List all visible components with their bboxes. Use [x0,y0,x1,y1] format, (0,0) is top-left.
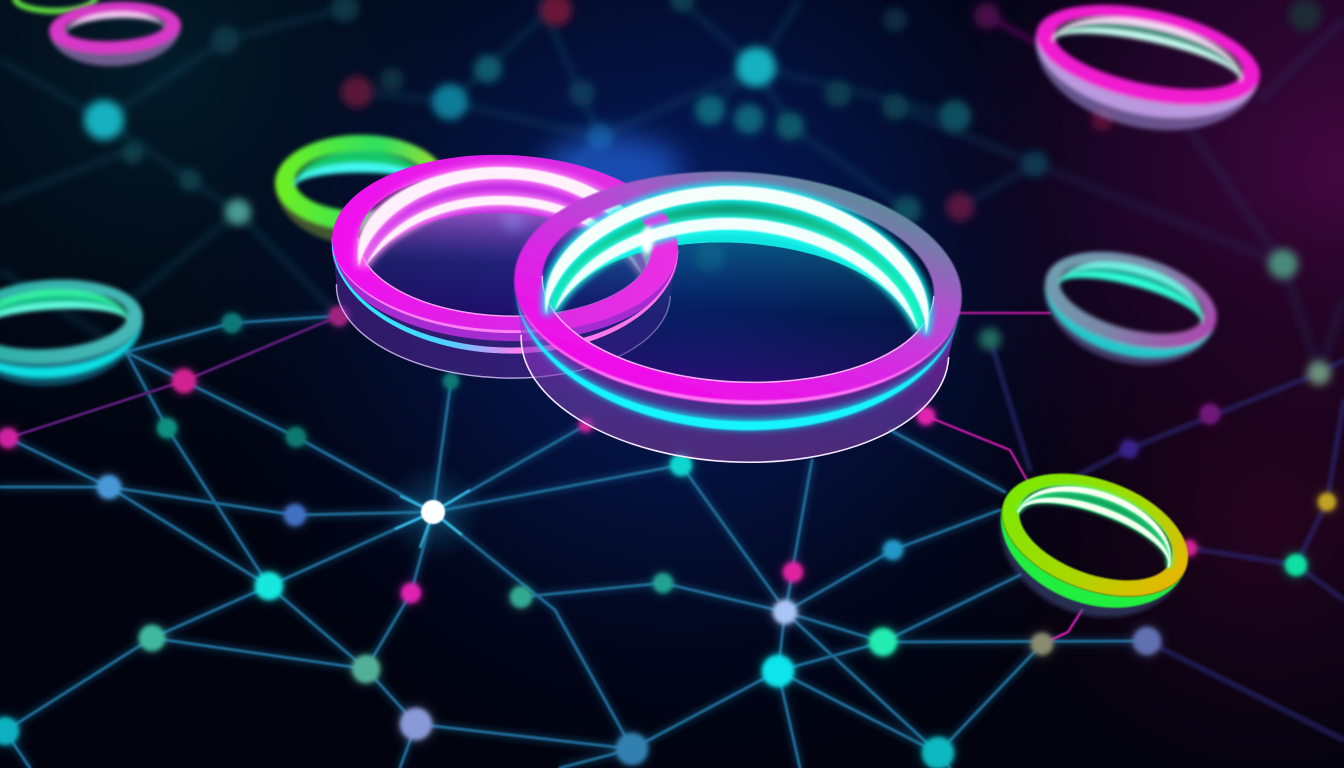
left ring base outline [333,284,670,384]
main ring green inner wall [549,180,930,340]
glow around foreground nodes [0,306,1336,768]
left ring section passing through the main ring [556,198,678,342]
main ring rim [508,160,968,416]
ring: top-right magenta [1021,0,1269,150]
ring: lime to yellow [976,450,1205,643]
main ring neon lines [508,174,967,416]
network lines: foreground, teal-blue [0,316,1147,768]
ring: large magenta (left) [327,149,681,384]
network lines: right side, violet-blue [990,339,1344,740]
main ring glass base [505,276,962,473]
main ring base outline [515,335,949,473]
ring: main, rim and neon lines [508,160,968,416]
foreground nodes [0,306,1336,768]
ring: teal at right [1030,235,1227,384]
ring: green behind the magenta ring [275,135,447,245]
left ring inner wall [360,165,652,280]
blue light behind the rings [542,136,682,204]
main ring cyan band [507,276,962,442]
left ring hole tint [360,208,649,320]
network hub node [383,462,483,562]
network lines: far, out of focus [0,0,1344,373]
main ring hole tint [546,233,927,392]
background nodes: out of focus [84,0,1331,385]
main ring cyan inner wall [554,213,923,331]
left ring glow lines [329,161,681,339]
glow under foreground network lines [0,316,1147,768]
ring: main, glass base and inner wall [505,178,967,473]
left ring glass base [327,238,678,384]
ring: top-left magenta [48,0,183,69]
magenta connector lines [8,16,1082,644]
ring: top-left green fragment [15,0,95,11]
left ring rim [329,149,681,339]
left ring side bands [328,238,678,359]
ring: far-left teal [0,274,147,392]
